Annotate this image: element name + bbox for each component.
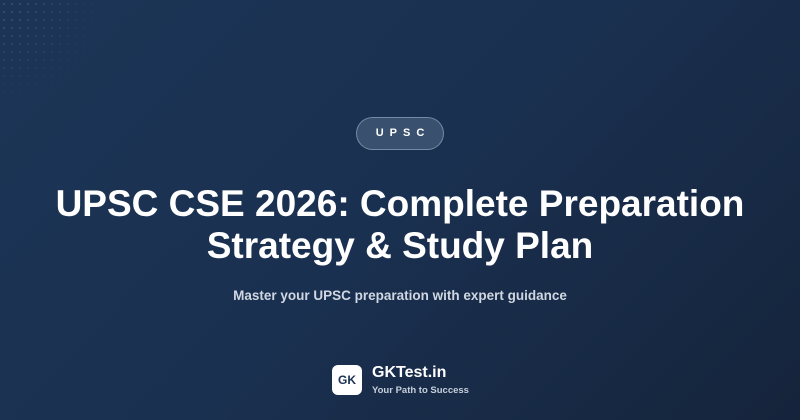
badge: UPSC: UPSC: [376, 127, 430, 139]
icon: GK box: GK: [338, 373, 356, 387]
tagline: Your Path to Success: [372, 385, 469, 396]
subtitle: Master your UPSC preparation with expert guidance: [233, 288, 567, 303]
title: UPSC CSE 2026: Complete Preparation: [56, 183, 744, 224]
icon: GK box: [332, 365, 362, 395]
brand name: GKTest.in: [372, 364, 446, 381]
logo: GKTest.in: [332, 364, 469, 396]
title: Strategy & Study Plan: [207, 225, 593, 266]
badge: UPSC: [356, 117, 444, 150]
title: [56, 183, 744, 266]
